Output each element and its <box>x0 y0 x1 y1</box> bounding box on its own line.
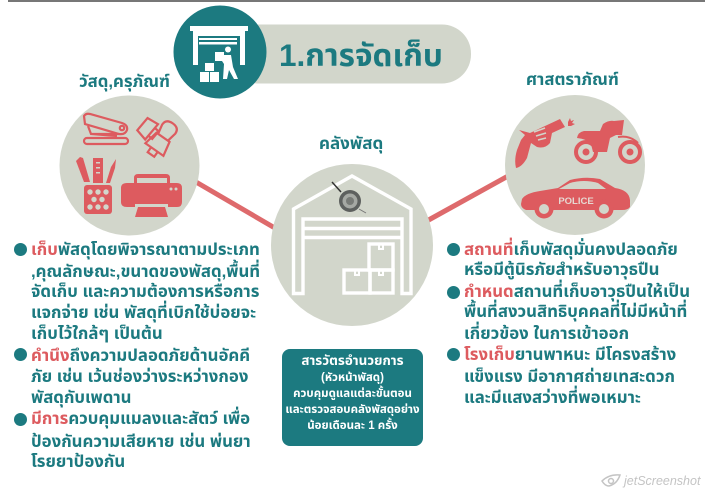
icon: printer <box>121 174 182 217</box>
watermark: jetScreenshot <box>624 474 700 488</box>
callout: responsible officer: (หัวหน้าพัสดุ) <box>321 372 384 384</box>
callout: responsible officer <box>282 349 423 446</box>
icon: stapler <box>84 114 128 144</box>
connector: right <box>425 175 510 222</box>
icon: police car: POLICE <box>558 196 594 207</box>
watermark icon <box>602 475 620 486</box>
icon: warehouse outline <box>294 176 411 294</box>
icon: seal <box>332 182 366 213</box>
icon: binder clips <box>136 116 182 161</box>
heading: warehouse: คลังพัสดุ <box>319 134 383 153</box>
text block: right bullets: แข็งแรง มีอากาศถ่ายเทสะดวก <box>464 367 675 386</box>
text block: right bullets: หรือมีตู้นิรภัยสำหรับอาวุธปืน <box>464 260 660 279</box>
text block: right bullets <box>447 238 690 407</box>
callout: responsible officer: และตรวจสอบคลังพัสดุอย่าง <box>285 404 420 416</box>
text block: left bullets: คำนึงถึงความปลอดภัยด้านอัคคี <box>31 346 250 365</box>
heading: supplies: วัสดุ,ครุภัณฑ์ <box>79 72 170 91</box>
text block: right bullets: สถานที่เก็บพัสดุมั่นคงปลอดภัย <box>464 240 678 259</box>
icon: revolver <box>515 118 575 168</box>
text block: left bullets: มีการควบคุมแมลงและสัตว์ เพื่อ <box>31 409 250 428</box>
text block: left bullets: แจกจ่าย เช่น พัสดุที่เบิกใช้บ่อยจะ <box>31 303 256 322</box>
callout: responsible officer: สารวัตรอำนวยการ <box>301 353 404 368</box>
title pill <box>230 24 471 84</box>
title: 1.การจัดเก็บ <box>279 37 443 73</box>
heading: weapons: ศาสตราภัณฑ์ <box>526 70 619 89</box>
text block: right bullets: พื้นที่สงวนสิทธิบุคคลที่ไม่มีหน้าที่ <box>464 302 687 321</box>
text block: left bullets <box>14 240 260 471</box>
text block: right bullets: เกี่ยวข้อง ในการเข้าออก <box>464 324 629 343</box>
text block: right bullets: โรงเก็บยานพาหนะ มีโครงสร้าง <box>464 345 676 364</box>
text block: left bullets: โรยยาป้องกัน <box>31 452 125 471</box>
panel circle: warehouse <box>271 164 433 326</box>
icon: motorcycle <box>576 120 640 162</box>
text block: left bullets: พัสดุกับเพดาน <box>31 388 132 407</box>
icon: warehouse worker badge <box>174 6 266 98</box>
callout: responsible officer: น้อยเดือนละ 1 ครั้ง <box>307 420 398 432</box>
text block: left bullets: จัดเก็บ และความต้องการหรือการ <box>31 282 259 301</box>
text block: left bullets: เก็บไว้ใกล้ๆ เป็นต้น <box>31 324 163 343</box>
connector: left <box>196 182 280 231</box>
callout: responsible officer: ควบคุมดูแลแต่ละขั้นตอน <box>293 388 412 400</box>
panel circle: supplies <box>60 96 200 236</box>
text block: left bullets: ,คุณลักษณะ,ขนาดของพัสดุ,พื้นที่ <box>31 262 260 281</box>
text block: right bullets: และมีแสงสว่างที่พอเหมาะ <box>464 388 641 407</box>
panel circle: weapons and vehicles <box>505 95 645 235</box>
text block: left bullets: เก็บพัสดุโดยพิจารณาตามประเภท <box>31 240 260 259</box>
text block: right bullets: กำหนดสถานที่เก็บอาวุธปืนให้เป็น <box>464 282 690 301</box>
icon: pen cup <box>76 157 116 214</box>
text block: left bullets: ภัย เช่น เว้นช่องว่างระหว่างกอง <box>31 367 248 386</box>
text block: left bullets: ป้องกันความเสียหาย เช่น พ่นยา <box>31 432 251 451</box>
